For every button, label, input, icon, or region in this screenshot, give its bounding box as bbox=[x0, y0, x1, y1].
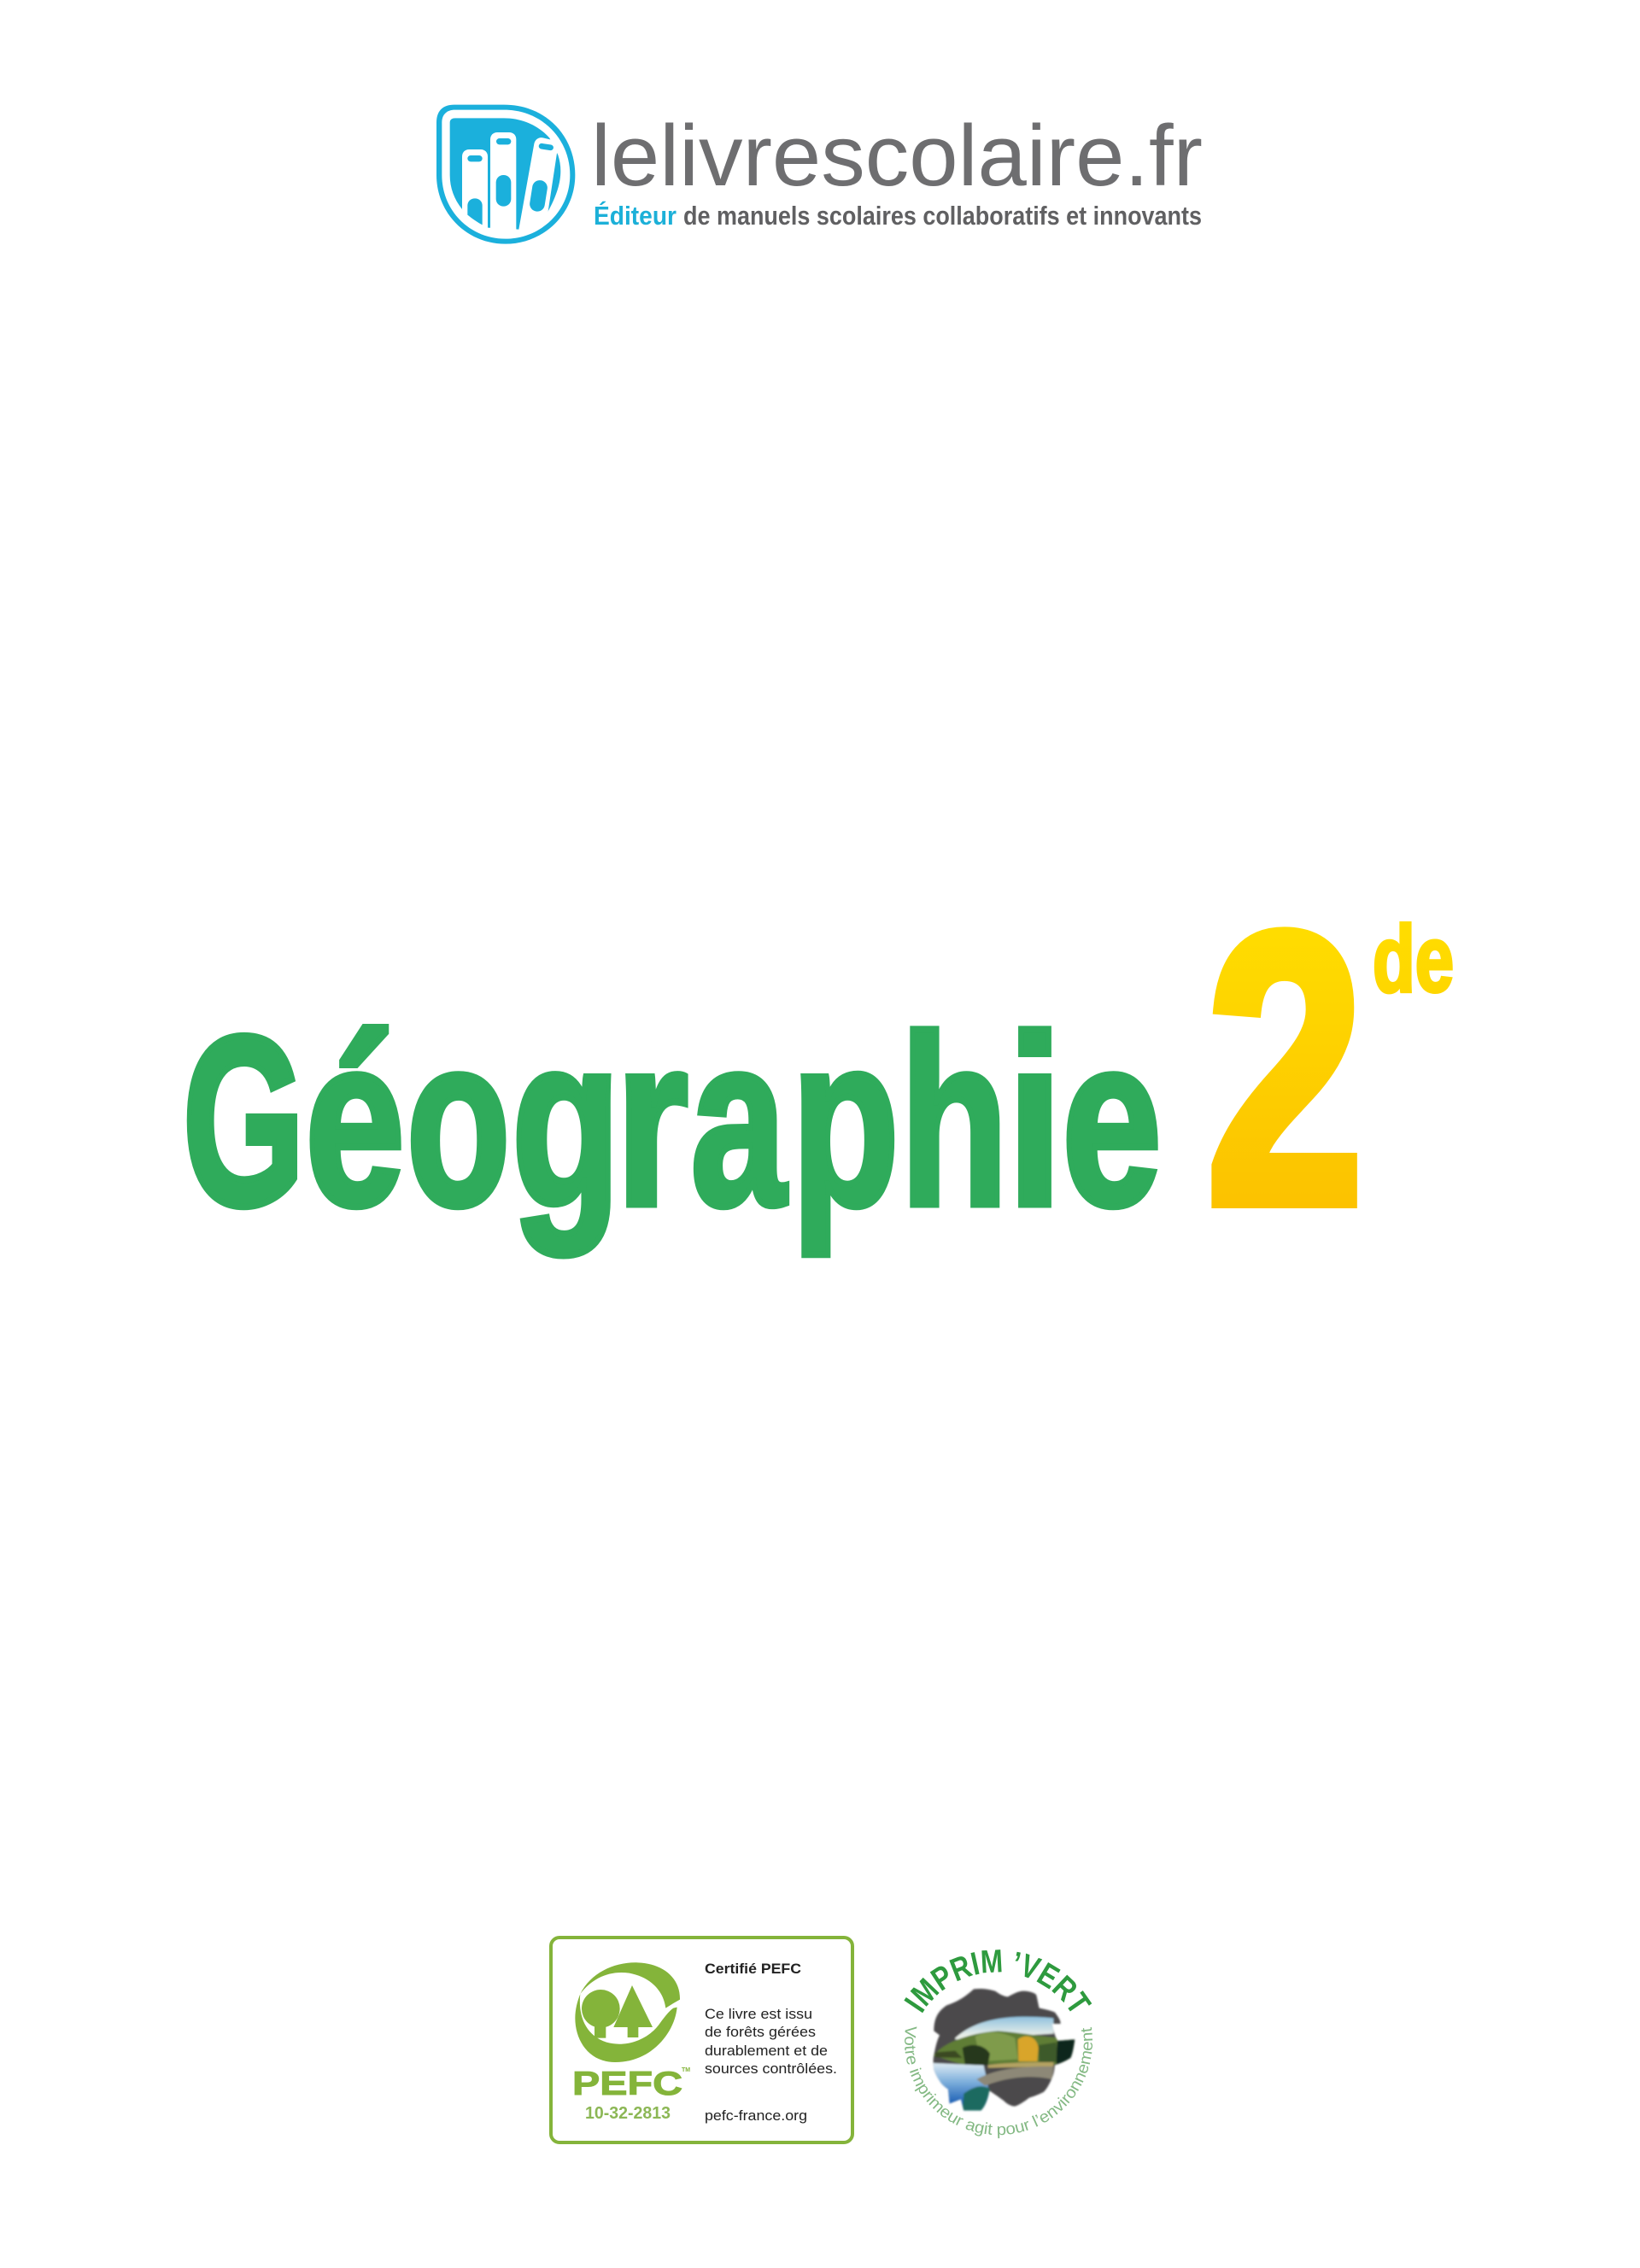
licence number: 10-32-2813 bbox=[585, 2103, 671, 2123]
certification text: sources contrôlées. bbox=[705, 2061, 837, 2077]
icon: landscape brush blob bbox=[932, 1987, 1076, 2113]
tagline: de manuels scolaires collaboratifs et innovants bbox=[683, 201, 1202, 231]
icon: books shield bbox=[436, 105, 575, 244]
title: Géographie: é bbox=[305, 985, 405, 1255]
grade: 2de: de bbox=[1373, 907, 1454, 1012]
arc slogan bbox=[905, 2025, 1092, 2135]
badge: Imprim'Vert bbox=[904, 1949, 1093, 2138]
badge: Imprim'Vert: IMPRIM ’VERT bbox=[904, 1949, 1092, 2014]
title: Géographie: p bbox=[792, 985, 899, 1257]
grade: 2de: 2 bbox=[1206, 853, 1364, 1284]
title: Géographie: G bbox=[183, 985, 305, 1255]
trademark: TM bbox=[682, 2067, 690, 2073]
wordmark: lelivrescolaire.fr bbox=[591, 108, 1203, 204]
certification text: Ce livre est issu bbox=[705, 2007, 812, 2022]
certification text: durablement et de bbox=[705, 2043, 828, 2059]
tagline: Éditeur bbox=[594, 201, 676, 231]
PEFC wordmark: PEFC bbox=[572, 2066, 682, 2102]
panel: PEFC certification bbox=[551, 1938, 852, 2142]
title: Géographie: g bbox=[512, 985, 620, 1257]
publisher logo bbox=[436, 105, 1203, 244]
title: Géographie: h bbox=[900, 985, 1008, 1255]
title: Géographie: a bbox=[691, 985, 787, 1255]
title: Géographie: r bbox=[616, 985, 688, 1255]
certification text: Certifié PEFC bbox=[705, 1961, 801, 1977]
title: Géographie: e bbox=[1062, 985, 1162, 1255]
certification text bbox=[705, 1961, 837, 2124]
title: Géographie: o bbox=[407, 985, 510, 1255]
arc heading: IMPRIM'VERT bbox=[918, 1973, 1076, 2022]
title: Géographie: i bbox=[1007, 985, 1063, 1255]
certification text: de forêts gérées bbox=[705, 2025, 816, 2040]
certification text: pefc-france.org bbox=[705, 2108, 807, 2124]
icon: PEFC trees logo bbox=[575, 1962, 680, 2062]
badge: Imprim'Vert: Votre imprimeur agit pour l’environnement bbox=[905, 2026, 1093, 2138]
